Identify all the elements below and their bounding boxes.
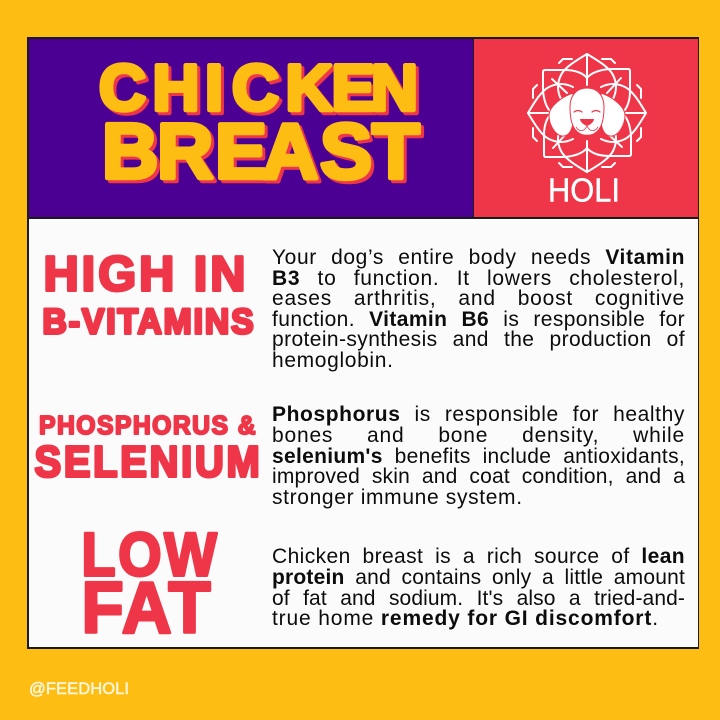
text block: b-vitamins: protein-synthesis and the production of	[272, 328, 685, 351]
text block: b-vitamins: function. Vitamin B6 is responsible for	[272, 308, 685, 331]
heading: b-vitamins: B-VITAMINS	[42, 302, 256, 342]
logo wordmark: HOLI	[548, 172, 620, 208]
panel: content	[29, 219, 698, 647]
heading: phosphorus: PHOSPHORUS &	[39, 410, 257, 440]
text block: low fat: true home remedy for GI discomfort.	[272, 607, 659, 630]
text block: low fat	[272, 545, 685, 630]
mouth	[576, 126, 598, 131]
text block: phosphorus and selenium	[272, 403, 685, 509]
panel: title	[29, 39, 473, 217]
text block: phosphorus and selenium: Phosphorus is responsible for healthy	[272, 403, 685, 426]
head	[570, 88, 604, 135]
left ear	[549, 93, 573, 136]
text block: phosphorus and selenium: stronger immune system.	[272, 486, 523, 509]
outer frame	[27, 37, 699, 649]
right ear	[601, 93, 625, 136]
nose	[580, 119, 594, 126]
text block: low fat: Chicken breast is a rich source of lean	[272, 545, 685, 568]
panel: logo	[474, 39, 698, 217]
text block: b-vitamins: hemoglobin.	[272, 349, 394, 372]
text block: phosphorus and selenium: improved skin and coat condition, and a	[272, 465, 685, 488]
icon: mandala dog logo	[528, 54, 646, 172]
eyes	[574, 110, 600, 112]
social handle: @FEEDHOLI	[29, 680, 129, 698]
heading: high in: HIGH IN	[44, 246, 248, 302]
heading: fat: FAT	[82, 568, 212, 647]
text block: b-vitamins: B3 to function. It lowers cholesterol,	[272, 267, 685, 290]
text block: phosphorus and selenium: selenium's benefits include antioxidants,	[272, 445, 685, 468]
title: chicken: CHICKEN	[99, 51, 418, 124]
title: breast: BREAST	[102, 107, 420, 195]
text block: phosphorus and selenium: bones and bone density, while	[272, 424, 685, 447]
text block: low fat: of fat and sodium. It's also a tried-and-	[272, 587, 685, 610]
text block: low fat: protein and contains only a little amount	[272, 566, 685, 589]
text block: b-vitamins: eases arthritis, and boost cognitive	[272, 287, 685, 310]
heading: selenium: SELENIUM	[34, 438, 262, 486]
text block: b-vitamins	[272, 246, 685, 372]
heading: low: LOW	[82, 520, 220, 588]
text block: b-vitamins: Your dog’s entire body needs Vitamin	[272, 246, 685, 269]
